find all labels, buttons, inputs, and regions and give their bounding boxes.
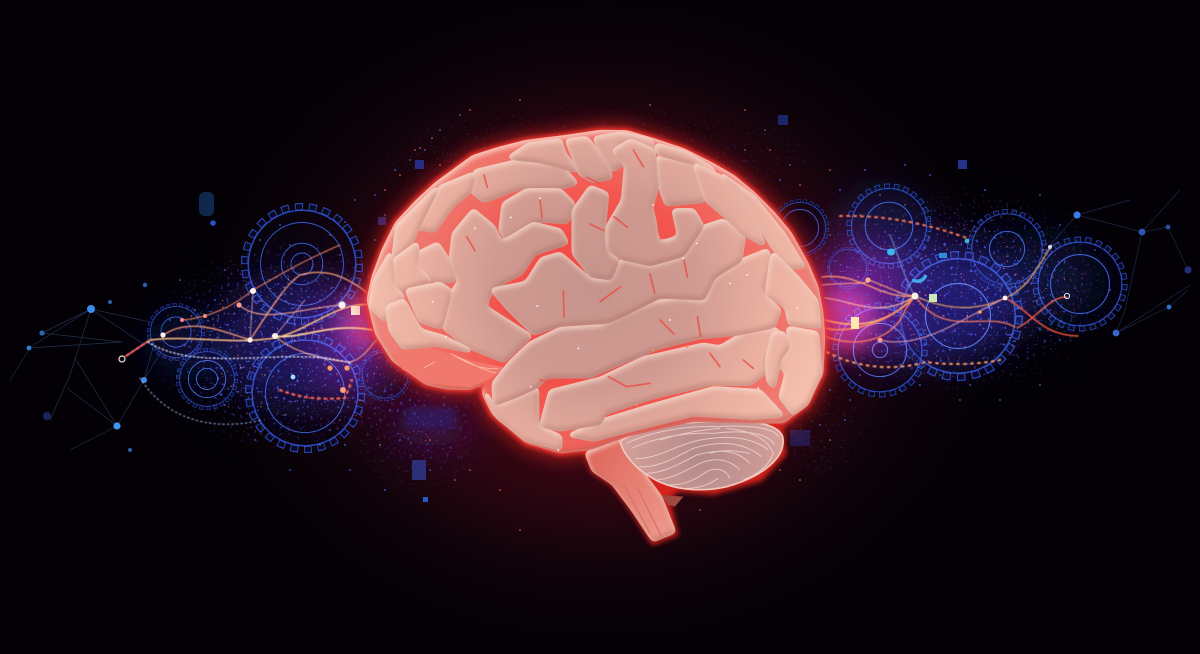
network: left constellation: [10, 309, 165, 450]
neural lines: right: [822, 216, 1078, 367]
particles: blue: [170, 150, 1060, 490]
brainstem: [587, 437, 683, 540]
neural nodes: left: [160, 288, 360, 393]
fine sulci across the gyri: [467, 150, 753, 387]
brain: [368, 132, 823, 540]
gyri: temporal lobe: [486, 251, 786, 448]
cerebrum base with red sulci: [368, 132, 823, 452]
network: right constellation: [1050, 190, 1190, 333]
blue and purple haze over gears: [150, 190, 1095, 447]
red ambient glow: [200, 0, 1000, 650]
blurred square pixels: [378, 115, 967, 502]
gears: right cluster: [773, 186, 1125, 395]
pink glow where neural lines meet the brain: [340, 286, 875, 354]
frontal underside: [393, 348, 502, 386]
frontal underside folds: [423, 353, 498, 373]
dust particle clouds: [148, 94, 1116, 500]
brain outer glow: [368, 132, 823, 542]
cerebellum: [620, 421, 783, 490]
network nodes: left: [27, 192, 216, 452]
particles: red and pink sparks: [360, 100, 830, 530]
gears: left cluster: [149, 207, 409, 449]
neural nodes: right: [851, 239, 1070, 342]
gyri: right side (occipital and parietal): [695, 165, 820, 413]
network nodes: right: [1073, 211, 1192, 336]
gyri: central and frontal: [444, 134, 743, 361]
sparkles on brain: [433, 198, 797, 450]
particles: light: [195, 115, 1110, 445]
neural lines: left: [126, 245, 380, 424]
gyri: left side (frontal pole): [371, 174, 473, 351]
